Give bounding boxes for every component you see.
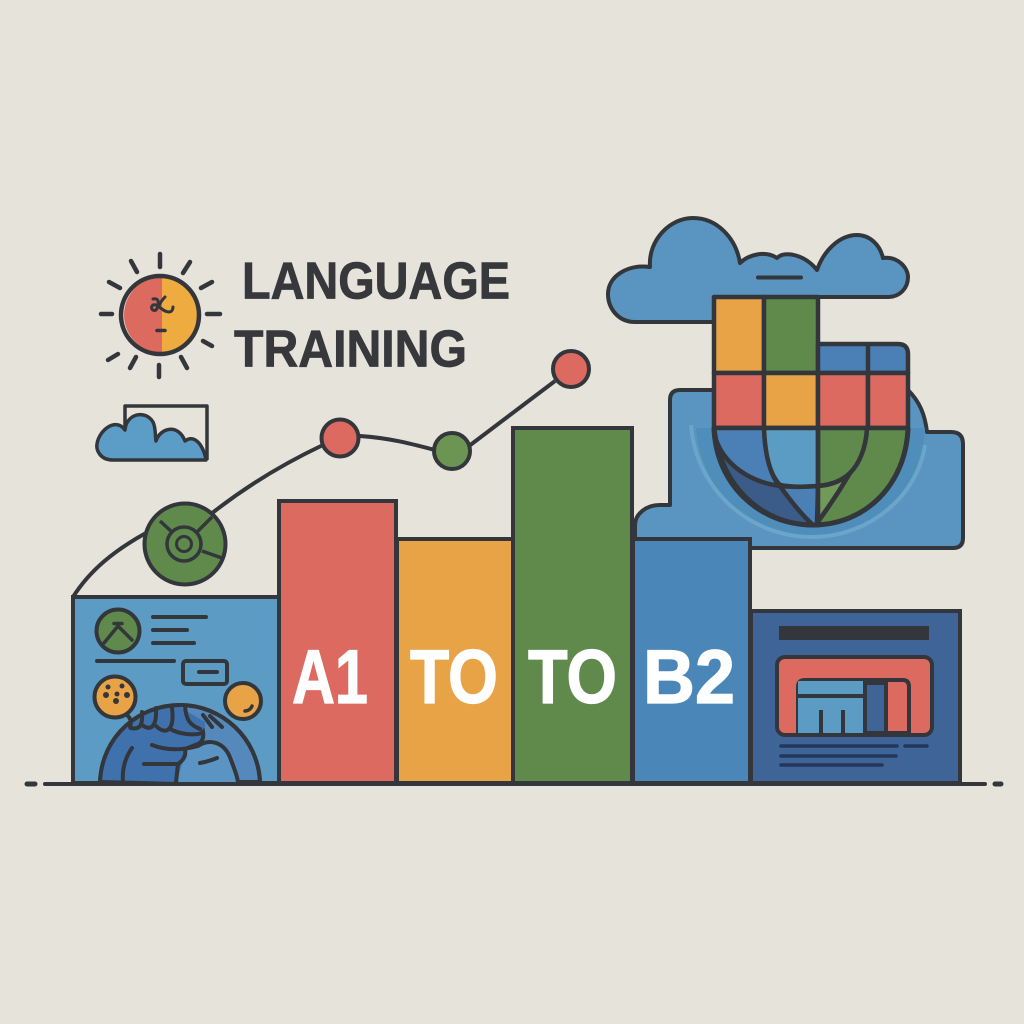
point: green [434,433,470,469]
small label box [183,661,227,684]
bar: first TO: TO [410,635,498,720]
icon: orange ball [225,683,261,719]
progress line chart [73,351,589,597]
icon: patchwork globe [714,297,908,525]
bar: A1: A1 [292,635,368,720]
point: green target [144,504,226,584]
icon: dotted orange ball [94,676,136,718]
bar: B2 [633,539,750,783]
bar: A1 [279,501,396,783]
globe halo [691,425,925,538]
upper cloud [608,218,908,322]
icon: clasped hands globe [100,705,260,782]
bar: second TO [513,428,632,783]
title: TRAINING [234,320,467,378]
panel: left learning board [73,597,279,783]
bar: second TO: TO [528,635,617,720]
text lines [97,617,206,661]
point: red [322,420,358,456]
icon: green compass badge [96,610,140,652]
lower large cloud [635,390,963,548]
bar: B2: B2 [643,635,735,720]
icon: small cloud with picture frame [97,406,207,460]
point: red top [553,351,589,387]
baseline [27,782,1001,786]
panel: navy web page [751,611,960,783]
bar: first TO [397,539,513,783]
title [234,252,510,378]
title: LANGUAGE [242,252,510,310]
icon: sun with face [101,254,220,377]
header bar [779,626,929,640]
caption lines [781,746,927,765]
red screen [777,657,932,735]
